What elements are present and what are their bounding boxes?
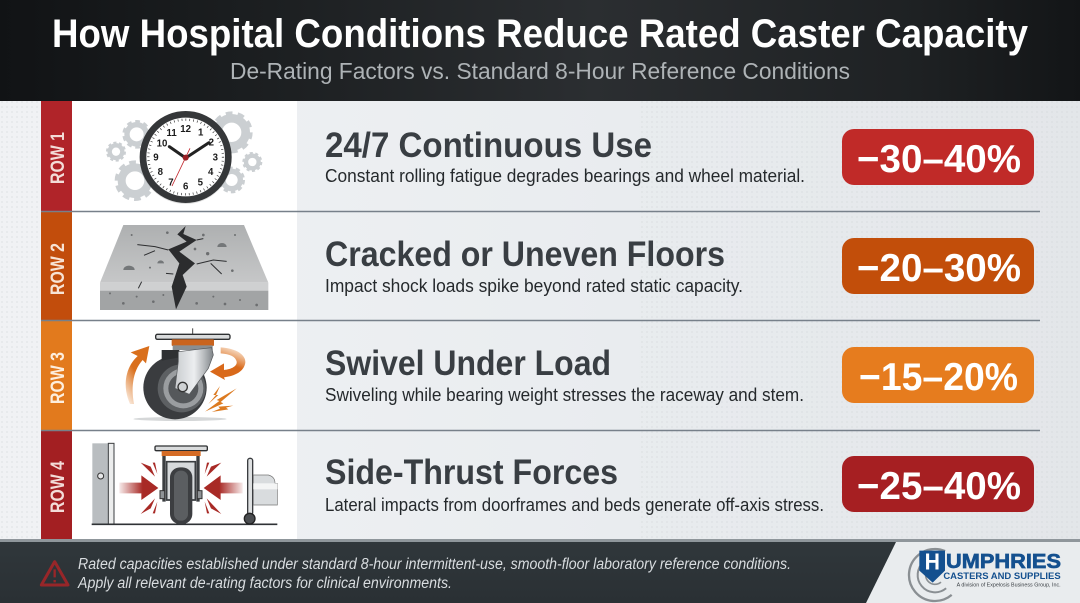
icon: warning triangle [41,562,68,585]
icon: cracked concrete slab [100,225,268,310]
row tab 1 [41,101,72,211]
icon: swivel caster [126,328,245,421]
row 2: cracked floors [41,212,1034,320]
heading: Swivel Under Load [325,343,611,383]
logo: Humphries Casters and Supplies [898,538,1061,603]
icon: clock and gears [107,112,261,204]
logo: Humphries Casters and Supplies: H [925,548,940,574]
description: Impact shock loads spike beyond rated static capacity. [325,276,743,296]
row tab 2 [41,212,72,320]
icon: clock and gears: 7 [168,177,174,188]
description: Lateral impacts from doorframes and beds generate off-axis stress. [325,495,824,515]
footnote [77,556,791,592]
row 3: swivel under load [41,321,1034,430]
row 1: 24/7 continuous use [41,101,1034,211]
icon: caster side impacts [92,443,277,524]
footer band [0,538,1080,603]
icon: clock and gears: 6 [183,182,189,193]
icon: clock and gears: 9 [153,153,159,164]
icon: clock and gears: 10 [157,138,167,149]
footnote: Rated capacities established under standard 8-hour intermittent-use, smooth-floor laboratory reference conditions. [78,556,791,573]
badge [842,347,1034,403]
icon: clock and gears: 1 [198,128,204,139]
badge: −30–40% [857,138,1021,181]
logo: Humphries Casters and Supplies: A division of Expelosis Business Group, Inc. [957,583,1061,589]
row tab 2: ROW 2 [47,243,69,295]
row 4: side-thrust forces [41,431,1034,539]
row tab 3: ROW 3 [47,352,69,404]
badge [842,238,1034,294]
badge [842,456,1034,512]
badge: −20–30% [857,247,1021,290]
logo: Humphries Casters and Supplies: CASTERS AND SUPPLIES [943,571,1061,581]
row tab 3 [41,321,72,430]
icon: clock and gears: 5 [198,177,204,188]
header band [0,0,1080,101]
icon: clock and gears: 11 [167,128,177,139]
icon: clock and gears: 12 [180,124,191,135]
logo: Humphries Casters and Supplies: UMPHRIES [946,550,1061,573]
badge: −25–40% [857,465,1021,508]
heading: Cracked or Uneven Floors [325,234,725,274]
icon: clock and gears: 4 [208,167,214,178]
footnote: Apply all relevant de-rating factors for clinical environments. [77,575,452,592]
description: Swiveling while bearing weight stresses the raceway and stem. [325,385,804,405]
badge [842,129,1034,185]
heading: Side-Thrust Forces [325,452,618,492]
subtitle: De-Rating Factors vs. Standard 8-Hour Reference Conditions [230,58,850,84]
badge: −15–20% [859,356,1018,399]
row tab 4: ROW 4 [47,461,69,513]
icon: clock and gears: 3 [213,153,219,164]
icon: clock and gears: 2 [209,138,214,149]
row tab 4 [41,431,72,539]
row tab 1: ROW 1 [47,132,69,184]
icon: clock and gears: 8 [158,167,164,178]
description: Constant rolling fatigue degrades bearings and wheel material. [325,166,805,186]
heading: 24/7 Continuous Use [325,125,652,165]
